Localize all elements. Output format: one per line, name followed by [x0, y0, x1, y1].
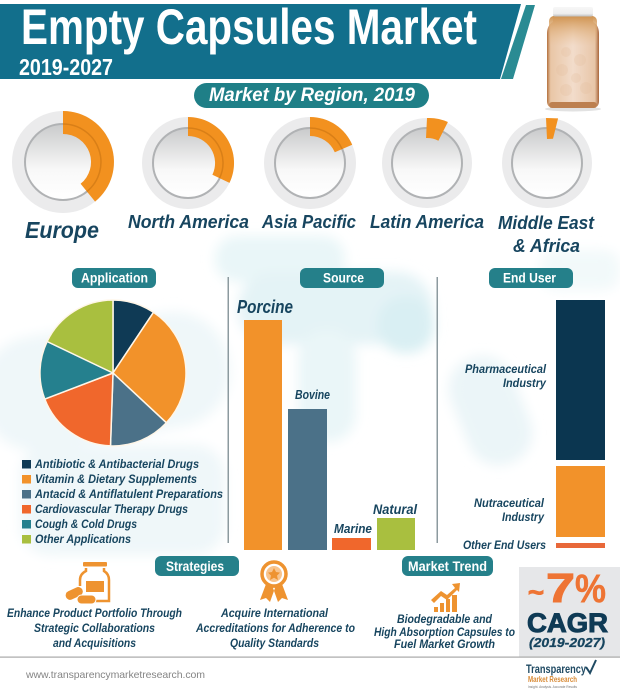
legend: application: Antibiotic & Antibacterial Drugs: [34, 459, 199, 471]
icon: award ribbon: [260, 562, 288, 602]
title: Empty Capsules Market: [21, 0, 477, 55]
text: market trend: Biodegradable and: [397, 614, 493, 626]
logo: Transparency Market Research: [526, 660, 596, 689]
section pill: Application: Application: [81, 270, 148, 286]
icon: capsule jar: [64, 562, 109, 604]
text: strategy 2: Acquire International: [220, 608, 329, 620]
donut: Europe: [12, 111, 114, 213]
legend: application: Antacid & Antiflatulent Preparations: [34, 489, 223, 501]
text: strategy 1: and Acquisitions: [53, 638, 136, 650]
callout: CAGR: (2019-2027): [529, 635, 605, 650]
text: strategy 1: Strategic Collaborations: [34, 623, 155, 635]
legend: application: Other Applications: [35, 534, 131, 546]
bar: Bovine: Bovine: [295, 388, 330, 402]
label: Middle East and Africa: & Africa: [513, 236, 580, 256]
logo: Transparency Market Research: Market Research: [528, 675, 577, 684]
bar: Natural: [373, 501, 418, 550]
section pill: Market Trend: [402, 556, 493, 576]
legend: application: Cardiovascular Therapy Drugs: [35, 504, 188, 516]
text: strategy 1: Enhance Product Portfolio Through: [7, 608, 182, 620]
segment: Pharmaceutical Industry: [465, 300, 605, 460]
section pill: Strategies: Strategies: [166, 559, 224, 574]
callout: CAGR: ~: [528, 577, 544, 607]
callout: CAGR: [519, 565, 620, 657]
legend: application: Vitamin & Dietary Supplements: [35, 474, 197, 486]
segment: Pharmaceutical Industry: Industry: [503, 378, 547, 390]
callout: CAGR: CAGR: [527, 608, 608, 638]
segment: Pharmaceutical Industry: Pharmaceutical: [465, 364, 547, 376]
text: strategy 2: Quality Standards: [230, 638, 319, 650]
logo: Transparency Market Research: Insight. Analysis. Accurate Results: [528, 684, 577, 689]
donut: North America: [142, 117, 234, 209]
label: Latin America: Latin America: [370, 212, 484, 232]
segment: Nutraceutical Industry: [474, 466, 605, 537]
subtitle years: 2019-2027: [19, 54, 113, 80]
segment: Other End Users: Other End Users: [463, 540, 546, 552]
label: Middle East and Africa: Middle East: [498, 213, 595, 233]
icon: growth chart: [431, 583, 460, 612]
text: market trend: [374, 614, 515, 651]
donut: Latin America: [382, 118, 472, 208]
bar: Marine: Marine: [334, 522, 372, 536]
header banner: [0, 0, 535, 80]
donut: Middle East and Africa: [502, 118, 592, 208]
bar: Natural: Natural: [373, 501, 418, 517]
label: Asia Pacific: Asia Pacific: [261, 212, 356, 232]
bottle image: [545, 7, 601, 112]
bar: Bovine: [288, 388, 330, 550]
donut: Asia Pacific: [264, 117, 356, 209]
text: market trend: Fuel Market Growth: [394, 639, 495, 651]
label: Middle East and Africa: [498, 213, 595, 256]
section pill: Market Trend: Market Trend: [408, 559, 487, 574]
background: blurred capsule watermark: [0, 236, 620, 555]
pie chart: application: [40, 300, 186, 446]
label: North America: North America: [128, 212, 249, 232]
legend: application: Cough & Cold Drugs: [35, 519, 137, 531]
section pill: End User: End User: [503, 270, 557, 286]
bar: Porcine: Porcine: [237, 297, 293, 317]
segment: Nutraceutical Industry: Nutraceutical: [474, 498, 545, 510]
section pill: Strategies: [155, 556, 239, 576]
text: market trend: High Absorption Capsules to: [374, 627, 515, 639]
bar: Marine: [332, 522, 372, 550]
segment: Other End Users: [463, 540, 605, 552]
logo: Transparency Market Research: Transparency: [526, 662, 586, 676]
bar chart: source: [237, 297, 418, 550]
callout: CAGR: %: [575, 567, 606, 611]
section pill: market by region: Market by Region, 2019: [209, 85, 415, 106]
stacked bar: end user: [463, 300, 605, 552]
section pill: Source: Source: [323, 270, 364, 286]
section pill: Application: [72, 268, 156, 288]
footer url: www.transparencymarketresearch.com: [25, 669, 205, 681]
section pill: Source: [300, 268, 384, 288]
text: strategy 1: [7, 608, 182, 650]
section pill: End User: [489, 268, 573, 288]
bar: Porcine: [237, 297, 293, 550]
text: strategy 2: Accreditations for Adherence to: [195, 623, 355, 635]
text: strategy 2: [195, 608, 355, 650]
segment: Nutraceutical Industry: Industry: [502, 512, 545, 524]
label: Europe: Europe: [25, 217, 99, 243]
callout: CAGR: 7: [546, 565, 575, 611]
legend: application: [22, 459, 223, 546]
